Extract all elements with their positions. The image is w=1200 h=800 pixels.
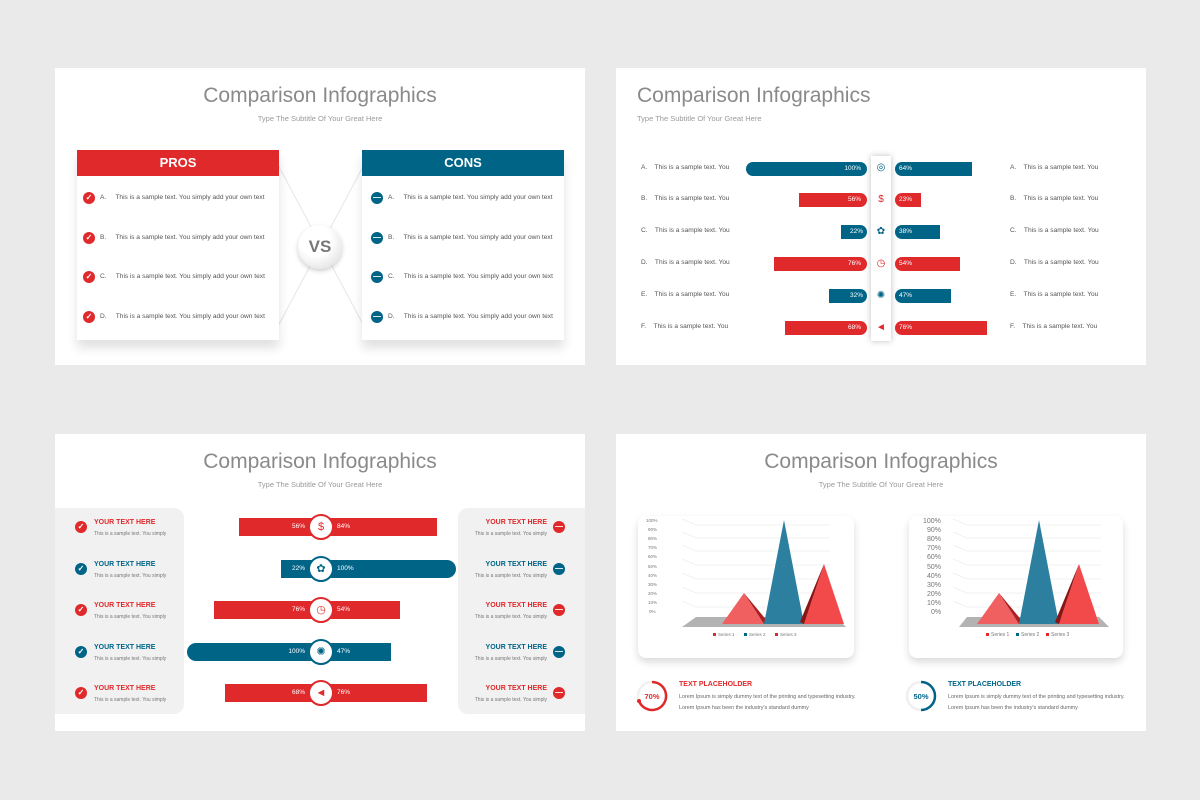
right list box: YOUR TEXT HERE — [486, 685, 547, 692]
left bars: 22% — [850, 228, 863, 235]
right list box: YOUR TEXT HERE — [486, 519, 547, 526]
right bars: 38% — [899, 228, 912, 235]
left bars: 68% — [848, 324, 861, 331]
panel: butterfly chart — [55, 434, 585, 731]
chart card 1: 70% — [648, 545, 657, 550]
chart card 1 — [638, 516, 854, 658]
chart card 1: 20% — [648, 591, 657, 596]
left list box: ✓ — [78, 564, 84, 573]
chart card 1: 60% — [648, 554, 657, 559]
left list box: This is a sample text. You simply — [94, 614, 166, 620]
butterfly bars: ◄ — [316, 687, 326, 699]
butterfly bars: 68% — [292, 689, 305, 696]
connector lines — [279, 166, 362, 325]
cons items: A. This is a sample text. You simply add your own text — [388, 194, 553, 201]
right list box: — — [555, 605, 563, 614]
pros header: PROS — [160, 155, 196, 170]
butterfly bars: 76% — [292, 606, 305, 613]
stat 50%: Lorem Ipsum is simply dummy text of the printing and typesetting industry. Lorem Ipsum has been the industry's standard dummy — [948, 694, 1125, 711]
chart card 2: 60% — [927, 554, 941, 561]
card: cons — [362, 150, 564, 340]
VS badge: VS — [309, 237, 331, 256]
left labels: B. This is a sample text. You — [641, 195, 729, 202]
chart card 2: 10% — [927, 600, 941, 607]
title: Comparison Infographics — [203, 450, 437, 473]
butterfly bars: 54% — [337, 606, 350, 613]
chart card 1: 40% — [648, 573, 657, 578]
pros items: ✓ — [86, 312, 92, 321]
butterfly bars: ✺ — [316, 646, 326, 658]
left list box: This is a sample text. You simply — [94, 573, 166, 579]
left list box: This is a sample text. You simply — [94, 697, 166, 703]
left bars — [746, 162, 867, 335]
butterfly bars: 76% — [337, 689, 350, 696]
pros items: C. This is a sample text. You simply add your own text — [100, 273, 265, 280]
left list box: This is a sample text. You simply — [94, 531, 166, 537]
chart card 2: 0% — [931, 609, 941, 616]
left list box: YOUR TEXT HERE — [94, 561, 155, 568]
chart card 2: 20% — [927, 591, 941, 598]
chart card 1: Series 2 — [749, 632, 766, 637]
cons items: D. This is a sample text. You simply add your own text — [388, 313, 553, 320]
right list box: This is a sample text. You simply — [475, 531, 547, 537]
left bars: 76% — [848, 260, 861, 267]
butterfly bars: ◷ — [316, 604, 326, 616]
left list box — [55, 508, 184, 714]
right labels: E. This is a sample text. You — [1010, 291, 1098, 298]
left list box: ✓ — [78, 605, 84, 614]
chart card 1: 50% — [648, 564, 657, 569]
right list box: This is a sample text. You simply — [475, 697, 547, 703]
pros items: D. This is a sample text. You simply add your own text — [100, 313, 265, 320]
chart card 1: 30% — [648, 582, 657, 587]
right bars: 64% — [899, 165, 912, 172]
stat 70%: Lorem Ipsum is simply dummy text of the printing and typesetting industry. Lorem Ipsum has been the industry's standard dummy — [679, 694, 856, 711]
right bars: 47% — [899, 292, 912, 299]
chart card 2: 30% — [927, 582, 941, 589]
left bars: 56% — [848, 196, 861, 203]
pros items: A. This is a sample text. You simply add your own text — [100, 194, 265, 201]
subtitle: Type The Subtitle Of Your Great Here — [258, 480, 382, 489]
cons header: CONS — [444, 155, 482, 170]
butterfly bars: 100% — [337, 565, 354, 572]
chart card 2: 90% — [927, 527, 941, 534]
cons items: — — [373, 312, 381, 321]
VS badge — [298, 225, 342, 269]
right list box: This is a sample text. You simply — [475, 573, 547, 579]
pros items: B. This is a sample text. You simply add your own text — [100, 234, 265, 241]
chart card 2: Series 3 — [1051, 632, 1070, 638]
title: Comparison Infographics — [764, 450, 998, 473]
center icon column: ◄ — [876, 322, 886, 333]
right list box: YOUR TEXT HERE — [486, 644, 547, 651]
left list box: ✓ — [78, 647, 84, 656]
chart card 2 — [909, 516, 1123, 658]
left list box: YOUR TEXT HERE — [94, 685, 155, 692]
chart card 2: Series 1 — [991, 632, 1010, 638]
right list box: YOUR TEXT HERE — [486, 602, 547, 609]
center icon column: ◎ — [877, 162, 885, 173]
right list box: This is a sample text. You simply — [475, 656, 547, 662]
left labels: A. This is a sample text. You — [641, 164, 729, 171]
chart card 2: 50% — [927, 564, 941, 571]
right labels: F. This is a sample text. You — [1010, 323, 1097, 330]
right bars — [895, 162, 987, 335]
center icon column: ◷ — [877, 258, 885, 269]
stat 70%: 70% — [644, 692, 660, 701]
right bars: 23% — [899, 196, 912, 203]
chart card 1: 80% — [648, 536, 657, 541]
subtitle: Type The Subtitle Of Your Great Here — [258, 114, 382, 123]
center icon column — [871, 156, 891, 341]
cons items: B. This is a sample text. You simply add your own text — [388, 234, 553, 241]
center icons — [308, 514, 334, 540]
pros items — [83, 192, 265, 323]
left labels: C. This is a sample text. You — [641, 227, 730, 234]
chart card 1: 0% — [649, 609, 656, 614]
stat 50%: 50% — [913, 692, 929, 701]
chart card 2: 100% — [923, 518, 941, 525]
left bars: 100% — [844, 165, 861, 172]
right list box: — — [555, 564, 563, 573]
center icon column: ✿ — [877, 226, 885, 237]
right labels — [1010, 164, 1099, 330]
pros header — [77, 150, 279, 176]
panel: pyramid charts — [616, 434, 1146, 731]
butterfly bars: ✿ — [316, 563, 326, 575]
left labels: D. This is a sample text. You — [641, 259, 730, 266]
right bars: 54% — [899, 260, 912, 267]
cons header — [362, 150, 564, 176]
title: Comparison Infographics — [203, 84, 437, 107]
right labels: D. This is a sample text. You — [1010, 259, 1099, 266]
chart card 1: 10% — [648, 600, 657, 605]
pros items: ✓ — [86, 272, 92, 281]
center icon column: ✺ — [877, 290, 885, 301]
stat 50% — [906, 680, 1125, 712]
cons items: — — [373, 233, 381, 242]
butterfly bars: 100% — [288, 648, 305, 655]
right labels: C. This is a sample text. You — [1010, 227, 1099, 234]
left labels: F. This is a sample text. You — [641, 323, 728, 330]
chart card 2: 40% — [927, 573, 941, 580]
cons items: C. This is a sample text. You simply add your own text — [388, 273, 553, 280]
stat 70% — [637, 680, 856, 712]
right list box — [458, 508, 585, 714]
stat 50%: TEXT PLACEHOLDER — [948, 681, 1021, 688]
left list box: This is a sample text. You simply — [94, 656, 166, 662]
title: Comparison Infographics — [637, 84, 870, 107]
right labels: B. This is a sample text. You — [1010, 195, 1098, 202]
panel: pros and cons — [55, 68, 585, 365]
left list box: YOUR TEXT HERE — [94, 602, 155, 609]
left list box: YOUR TEXT HERE — [94, 519, 155, 526]
butterfly bars: 47% — [337, 648, 350, 655]
left labels — [641, 164, 730, 330]
cons items: — — [373, 193, 381, 202]
chart card 2: 80% — [927, 536, 941, 543]
chart card 1: Series 3 — [780, 632, 797, 637]
cons items: — — [373, 272, 381, 281]
subtitle: Type The Subtitle Of Your Great Here — [637, 114, 762, 123]
chart card 2: Series 2 — [1021, 632, 1040, 638]
center icons: $ — [318, 521, 324, 533]
right labels: A. This is a sample text. You — [1010, 164, 1098, 171]
butterfly bars: 56% — [292, 523, 305, 530]
butterfly bars: 22% — [292, 565, 305, 572]
cons items — [371, 192, 553, 323]
left list box: ✓ — [78, 688, 84, 697]
right list box: — — [555, 522, 563, 531]
stat 70%: TEXT PLACEHOLDER — [679, 681, 752, 688]
left bars: 32% — [850, 292, 863, 299]
card: pros — [77, 150, 279, 340]
butterfly bars — [187, 514, 456, 706]
right list box: YOUR TEXT HERE — [486, 561, 547, 568]
chart card 1: 100% — [646, 518, 658, 523]
right list box: — — [555, 647, 563, 656]
chart card 2: 70% — [927, 545, 941, 552]
pros items: ✓ — [86, 193, 92, 202]
chart card 1: Series 1 — [718, 632, 735, 637]
right list box: — — [555, 688, 563, 697]
chart card 1: 90% — [648, 527, 657, 532]
panel: bar comparison — [616, 68, 1146, 365]
butterfly bars: 84% — [337, 523, 350, 530]
center icon column: $ — [878, 194, 884, 205]
subtitle: Type The Subtitle Of Your Great Here — [819, 480, 943, 489]
right list box: This is a sample text. You simply — [475, 614, 547, 620]
right bars: 76% — [899, 324, 912, 331]
left list box: ✓ — [78, 522, 84, 531]
left list box: YOUR TEXT HERE — [94, 644, 155, 651]
pros items: ✓ — [86, 233, 92, 242]
left labels: E. This is a sample text. You — [641, 291, 729, 298]
